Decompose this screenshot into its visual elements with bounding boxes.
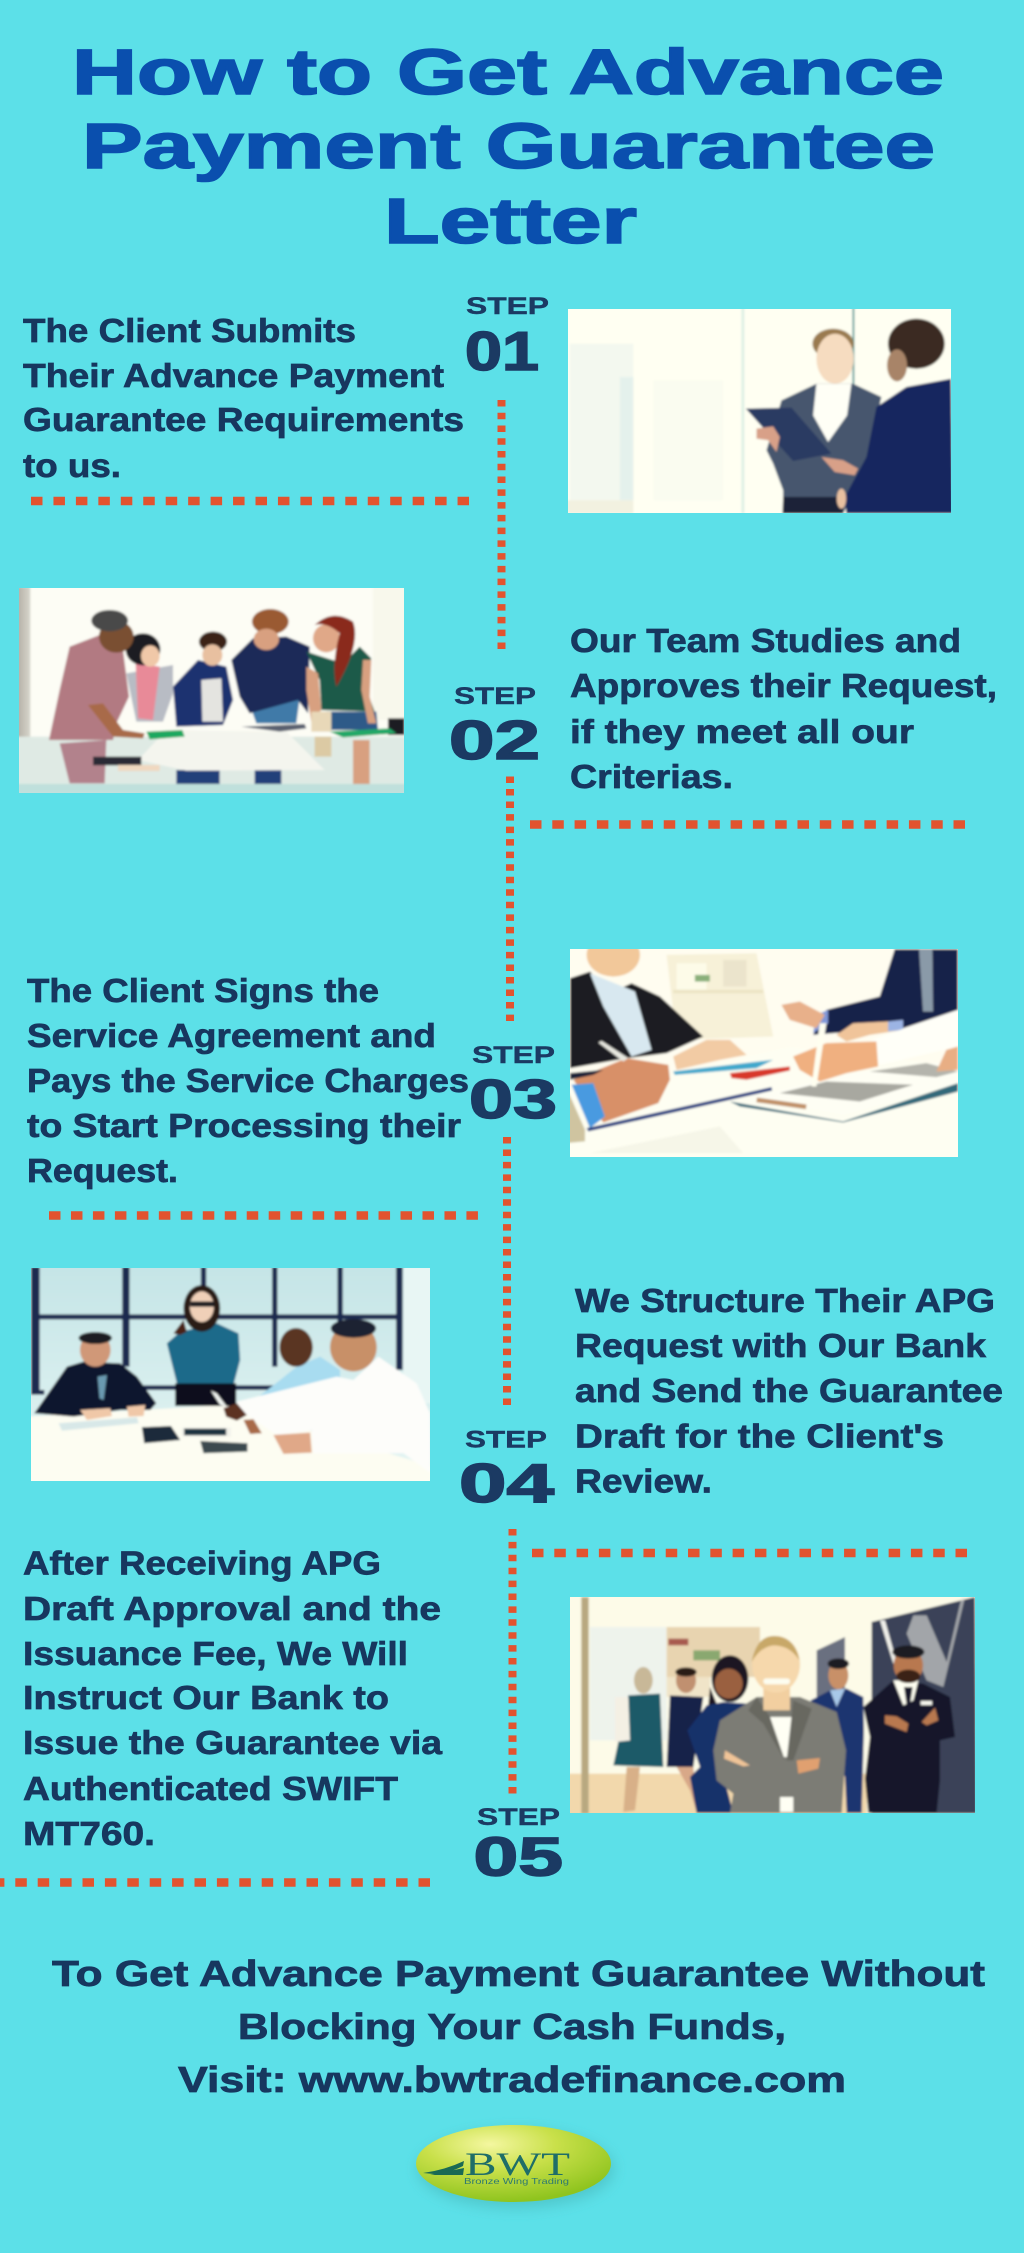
step 5 text <box>23 1545 443 1852</box>
call to action: Blocking Your Cash Funds, <box>238 2006 786 2047</box>
photo: team studying plans at a table <box>19 588 404 793</box>
panel: step 2 <box>10 580 997 800</box>
step 3 text: The Client Signs the <box>27 972 379 1009</box>
call to action <box>52 1953 985 2100</box>
photo: woman with clipboard talking to a man <box>568 309 951 513</box>
step 1 text <box>23 312 464 484</box>
step 5 badge: 05 <box>474 1826 563 1888</box>
step 3 text: Request. <box>27 1152 178 1189</box>
logo: Bronze Wing Trading: Bronze Wing Trading <box>464 2176 569 2186</box>
step 4 text: and Send the Guarantee <box>575 1372 1003 1409</box>
logo: Bronze Wing Trading: BWT <box>465 2147 570 2183</box>
step 1 badge: 01 <box>465 320 539 382</box>
step 4 text <box>575 1282 1003 1500</box>
step 4 badge: 04 <box>459 1452 555 1514</box>
step 2 text: if they meet all our <box>570 713 914 750</box>
step 5 badge: STEP <box>477 1804 560 1831</box>
step 1 text: to us. <box>23 447 121 484</box>
step 5 badge <box>474 1804 563 1888</box>
call to action: Visit: www.bwtradefinance.com <box>178 2059 846 2100</box>
step 4 text: Request with Our Bank <box>575 1327 987 1364</box>
step 4 badge: STEP <box>465 1426 547 1454</box>
step 3 text: to Start Processing their <box>27 1107 461 1144</box>
title: How to Get Advance <box>72 36 944 108</box>
step 3 text: Pays the Service Charges <box>27 1062 469 1099</box>
step 4 text: Draft for the Client's <box>575 1418 944 1454</box>
step 3 badge: STEP <box>472 1042 555 1069</box>
step 2 badge: 02 <box>449 709 540 771</box>
step 2 badge: STEP <box>454 683 536 710</box>
logo: Bronze Wing Trading <box>416 2125 614 2208</box>
step 5 text: MT760. <box>23 1815 155 1852</box>
title <box>72 36 944 257</box>
panel: step 5 <box>23 1545 980 1888</box>
step 2 text: Criterias. <box>570 758 733 795</box>
step 4 badge <box>459 1426 555 1514</box>
step 5 text: Draft Approval and the <box>23 1590 441 1627</box>
step 2 badge <box>449 683 540 771</box>
step 3 text <box>27 972 469 1189</box>
photo: business people signing documents <box>570 949 958 1157</box>
step 1 text: The Client Submits <box>23 312 356 349</box>
panel: step 3 <box>27 933 970 1189</box>
step 5 text: Instruct Our Bank to <box>23 1679 389 1716</box>
step 5 text: Authenticated SWIFT <box>23 1770 398 1807</box>
step 2 text <box>570 622 997 795</box>
step 3 badge: 03 <box>469 1068 557 1130</box>
step 4 text: We Structure Their APG <box>575 1282 995 1319</box>
photo: four colleagues at a meeting table <box>31 1268 430 1481</box>
panel: step 4 <box>20 1260 1003 1514</box>
step 3 badge <box>469 1042 557 1130</box>
step 1 text: Their Advance Payment <box>23 357 444 394</box>
step 1 text: Guarantee Requirements <box>23 401 464 438</box>
step 2 text: Approves their Request, <box>570 667 997 704</box>
title: Payment Guarantee <box>82 110 935 182</box>
step 5 text: Issuance Fee, We Will <box>23 1635 408 1672</box>
step 5 text: After Receiving APG <box>23 1545 381 1582</box>
step 5 text: Issue the Guarantee via <box>23 1724 443 1761</box>
panel: step 1 <box>23 293 960 520</box>
step 1 badge: STEP <box>466 293 549 320</box>
step 1 badge <box>465 293 549 382</box>
step 3 text: Service Agreement and <box>27 1017 436 1054</box>
photo: smiling business team with arms crossed <box>570 1597 975 1813</box>
step 2 text: Our Team Studies and <box>570 622 961 659</box>
title: Letter <box>384 185 637 257</box>
call to action: To Get Advance Payment Guarantee Without <box>52 1953 985 1994</box>
step 4 text: Review. <box>575 1462 712 1500</box>
